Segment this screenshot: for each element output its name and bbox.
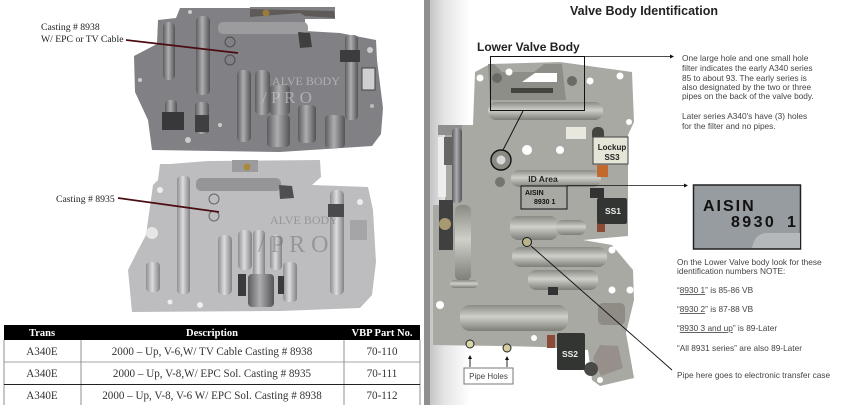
text: pipe note: Pipe here goes to electronic transfer case <box>677 370 831 380</box>
text: filter note: Later series A340's have (3) holes <box>682 111 807 121</box>
text: filter note: pipes on the back of the valve body. <box>682 91 814 101</box>
icon: SS2 solenoid: SS2 <box>562 349 578 359</box>
label: lockup SS3: Lockup <box>598 143 626 152</box>
label: pipe holes <box>464 355 513 384</box>
table row 1 <box>26 346 398 358</box>
table row 1: 70-110 <box>366 346 398 358</box>
label: casting 8938: W/ EPC or TV Cable <box>41 34 124 45</box>
arrow: casting 8938 <box>126 40 238 53</box>
text: 8931 series: “All 8931 series” are also 89-Later <box>677 343 802 353</box>
text: filter note: filter indicates the early A340 series <box>682 63 813 73</box>
table: part numbers <box>4 325 420 405</box>
table row 1: 2000 – Up, V-6,W/ TV Cable Casting # 8938 <box>112 346 313 358</box>
photo: AISIN 8930 1 detail: 8930 <box>731 214 776 231</box>
table header <box>4 325 420 340</box>
callout line: filter circle <box>491 111 523 170</box>
photo: lower valve body <box>433 62 634 386</box>
photo: valve body casting 8938: ALVE BODY <box>272 74 340 88</box>
table row 3: A340E <box>26 390 58 402</box>
label: casting 8938: Casting # 8938 <box>41 22 100 33</box>
table row 3 <box>26 390 398 402</box>
title: Valve Body Identification <box>570 4 718 18</box>
text: filter note: also designated by the two or three <box>682 82 812 92</box>
text: filter note: 85 to about 93. The early series is <box>682 73 807 83</box>
photo: valve body casting 8938 <box>134 7 383 152</box>
arrow: ID area to detail <box>567 184 688 188</box>
text: 8930 1: “8930 1” is 85-86 VB <box>677 285 754 295</box>
callout box: filter area <box>490 56 584 110</box>
table row 2: A340E <box>26 368 58 380</box>
photo: valve body casting 8935: / P R O <box>258 232 328 258</box>
arrow: filter note <box>584 54 674 58</box>
arrow: casting 8935 <box>118 198 219 212</box>
label: pipe holes: Pipe Holes <box>469 372 508 381</box>
table row 2: 70-111 <box>367 368 397 380</box>
text: 8930 3 and up: “8930 3 and up” is 89-Later <box>677 323 777 333</box>
icon: SS1 solenoid: SS1 <box>605 206 621 216</box>
label: AISIN ID box <box>521 186 567 209</box>
text: identification note: On the Lower Valve body look for these <box>677 257 822 267</box>
photo: AISIN 8930 1 detail <box>694 185 800 249</box>
arrow: pipe to transfer case <box>522 238 672 370</box>
photo: valve body casting 8935 <box>128 160 376 312</box>
table row 1: A340E <box>26 346 58 358</box>
label: AISIN ID box: AISIN <box>525 190 544 197</box>
icon: SS2 solenoid <box>557 333 585 370</box>
table row 3: 70-112 <box>366 390 398 402</box>
photo: AISIN 8930 1 detail: 1 <box>787 214 796 231</box>
table header: Description <box>186 328 238 339</box>
table row 2: 2000 – Up, V-8,W/ EPC Sol. Casting # 8935 <box>113 368 312 380</box>
text: filter note: One large hole and one small hole <box>682 53 809 63</box>
label: lockup SS3: SS3 <box>604 153 620 162</box>
table row 3: 2000 – Up, V-8, V-6 W/ EPC Sol. Casting # 8938 <box>102 390 322 402</box>
text: 8930 2: “8930 2” is 87-88 VB <box>677 304 754 314</box>
icon: SS1 solenoid <box>597 198 627 224</box>
table header: VBP Part No. <box>352 328 413 339</box>
photo: valve body casting 8938: / P R O <box>262 88 312 107</box>
photo: valve body casting 8935: ALVE BODY <box>270 213 338 227</box>
table header: Trans <box>29 328 55 339</box>
photo: AISIN 8930 1 detail: AISIN <box>703 198 756 215</box>
label: ID area: ID Area <box>528 174 558 184</box>
text: identification note: identification numbers NOTE: <box>677 266 785 276</box>
label: AISIN ID box: 8930 1 <box>534 199 556 206</box>
heading: lower valve body: Lower Valve Body <box>477 40 580 54</box>
label: casting 8935: Casting # 8935 <box>56 194 115 205</box>
table row 2 <box>26 368 397 380</box>
text: filter note: for the filter and no pipes. <box>682 121 776 131</box>
label: lockup SS3 <box>593 137 628 164</box>
page divider shadow <box>424 0 470 405</box>
label: casting 8938 <box>41 22 124 45</box>
